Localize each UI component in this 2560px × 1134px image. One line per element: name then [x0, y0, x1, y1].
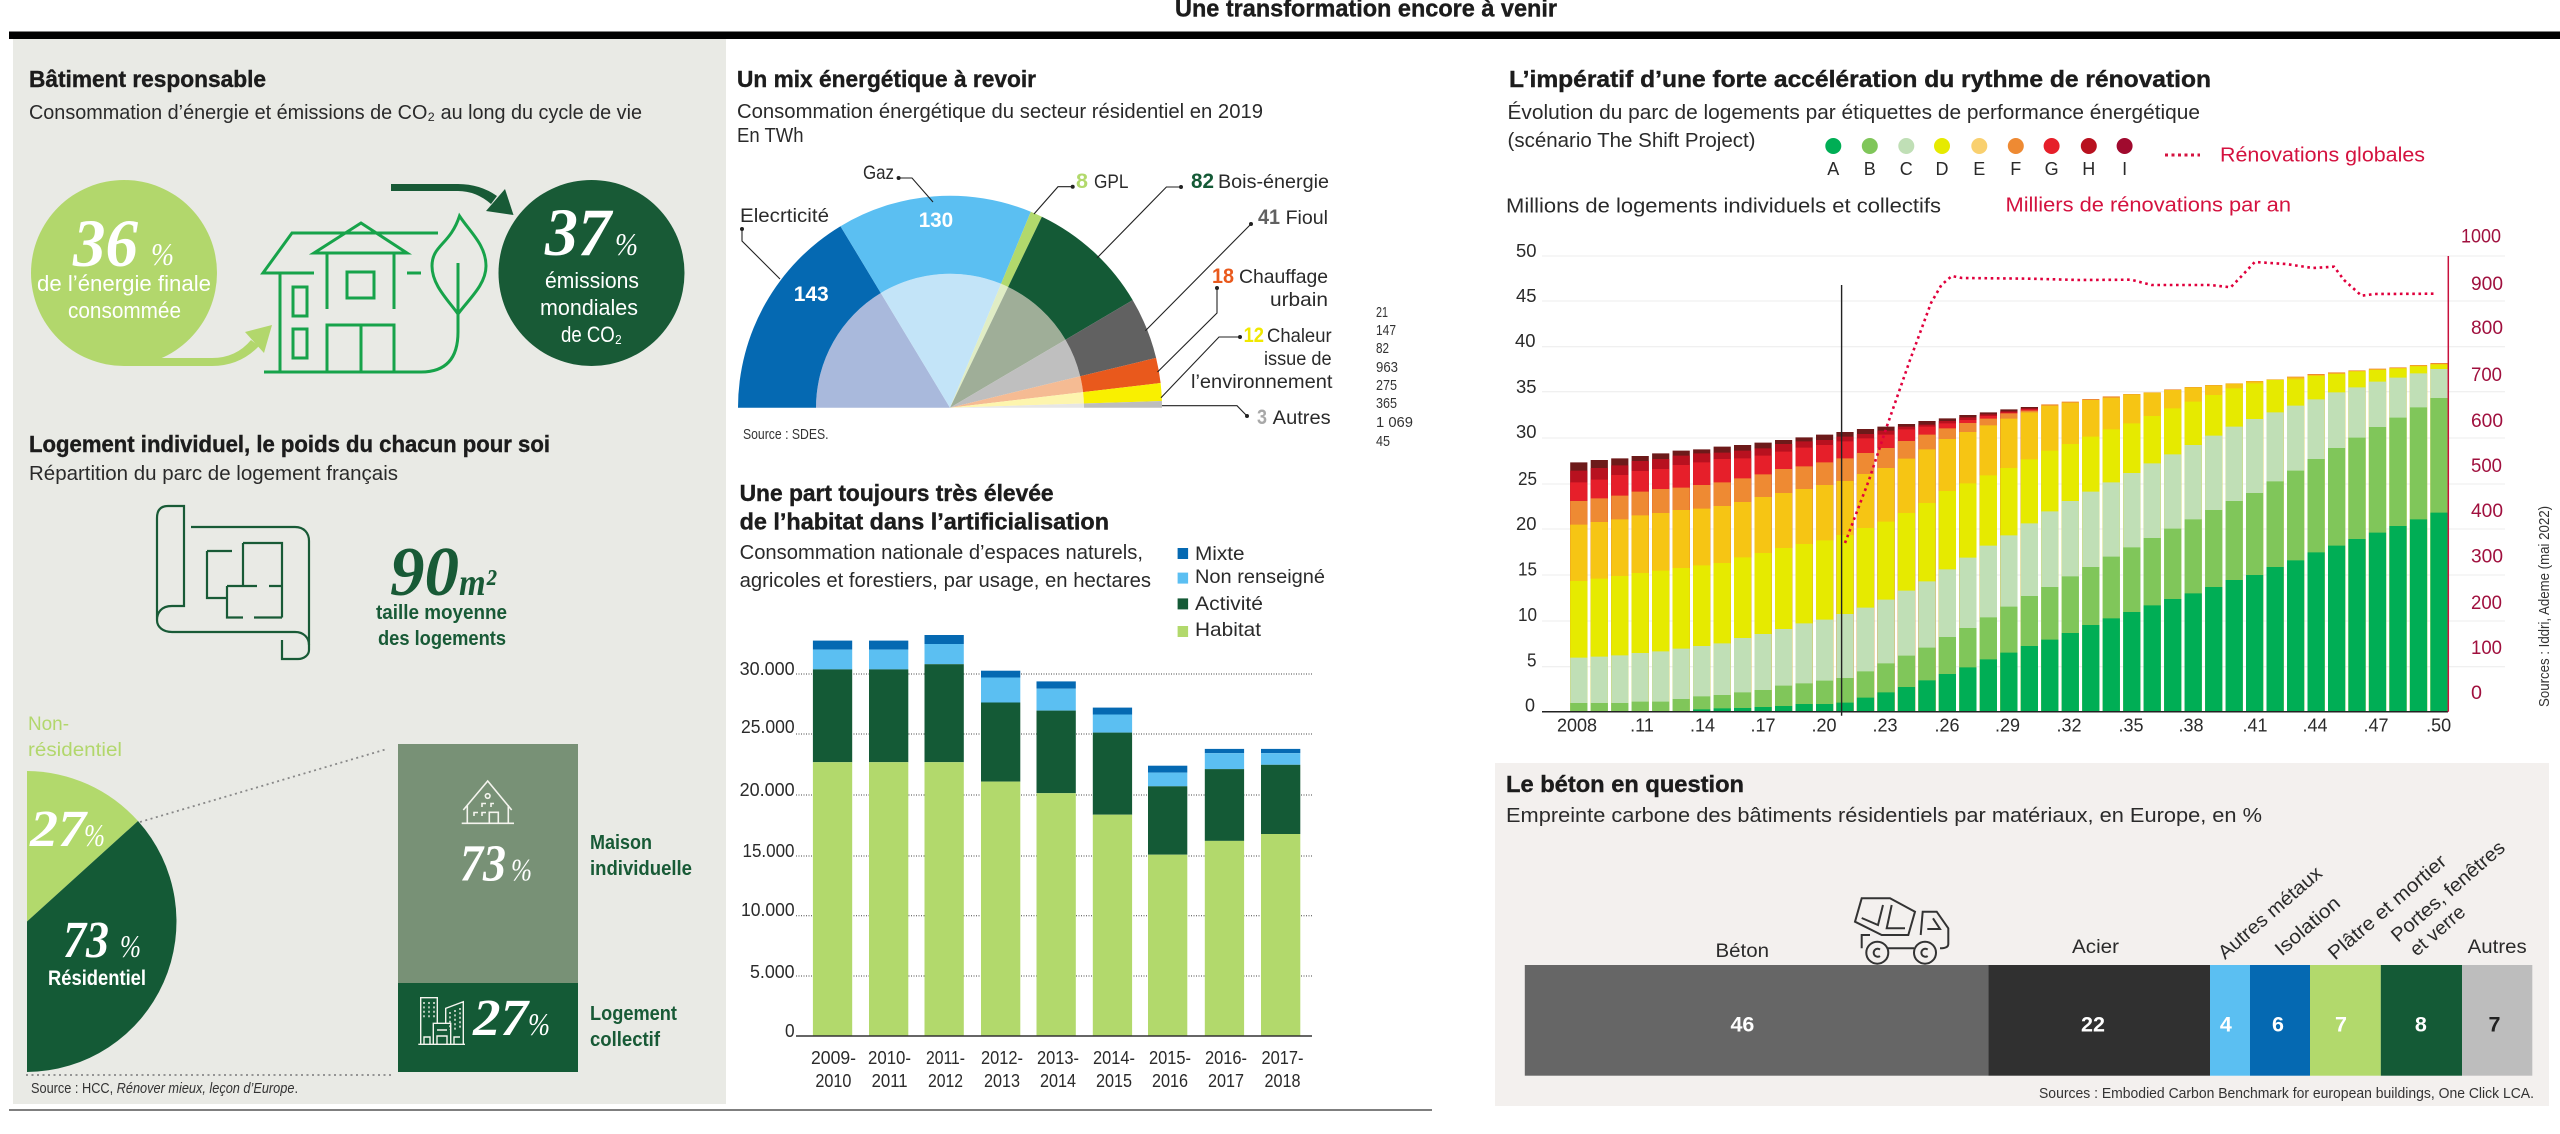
left axis labels: 35 — [1516, 377, 1536, 397]
labels: sources d'énergie: Chaleur — [1267, 325, 1332, 347]
y axis labels: 5.000 — [750, 962, 795, 982]
left axis labels — [1515, 241, 1537, 716]
stray data numbers: 82 — [1376, 340, 1389, 357]
callout: 36% énergie finale — [31, 180, 272, 366]
stray data numbers: 21 — [1376, 304, 1388, 321]
series: étiquette D — [1579, 365, 2439, 712]
chart: barre empreinte carbone: 7 — [2489, 1013, 2501, 1037]
left axis labels: 50 — [1516, 241, 1536, 261]
left axis labels: 25 — [1518, 469, 1537, 489]
panel: le béton en question — [1495, 763, 2549, 1106]
stat: 90 m² — [376, 534, 507, 650]
x axis labels: .41 — [2242, 716, 2268, 736]
subtitle: empreinte carbone: Empreinte carbone des bâtiments résidentiels par matériaux, en Europe, en % — [1506, 804, 2262, 827]
labels: sources d'énergie: Gaz — [863, 162, 894, 184]
chart: half pie résidentiel: % — [120, 928, 141, 964]
x axis labels: .29 — [1995, 716, 2020, 736]
bar: 2009-2010 — [813, 641, 852, 1036]
x axis labels: 2017 — [1208, 1071, 1244, 1091]
callout: 37% émissions mondiales: émissions — [545, 268, 639, 293]
series: étiquette B — [1579, 398, 2439, 712]
subtitle: évolution du parc: Évolution du parc de logements par étiquettes de performance énergétique — [1508, 101, 2200, 124]
y axis labels — [740, 659, 795, 1041]
labels: matériaux: Béton — [1716, 940, 1769, 962]
stray data numbers: 963 — [1376, 359, 1398, 376]
labels: matériaux: Acier — [2072, 936, 2120, 958]
x axis labels: 2014- — [1093, 1048, 1135, 1068]
subtitle: répartition du parc: Répartition du parc de logement français — [29, 462, 398, 485]
chart: half pie résidentiel: 27 — [29, 801, 88, 858]
labels: sources d'énergie: issue de — [1264, 348, 1332, 370]
legend: rénovations globales: Rénovations globales — [2220, 144, 2425, 167]
stacked bar: type de logement: 73 — [460, 836, 506, 892]
labels: sources d'énergie: Bois-énergie — [1218, 171, 1329, 193]
labels: sources d'énergie: 3 — [1257, 405, 1267, 429]
label: non-résidentiel: résidentiel — [28, 739, 122, 761]
x axis labels: 2011- — [926, 1048, 965, 1068]
callout: 36% énergie finale: % — [151, 236, 174, 272]
x axis labels: .23 — [1872, 716, 1898, 736]
chart: barre empreinte carbone: 46 — [1730, 1013, 1754, 1037]
icon: floor plan scroll — [157, 506, 309, 659]
series: étiquette I — [1579, 407, 2029, 712]
labels: matériaux: Portes, fenêtres — [2387, 837, 2510, 947]
legend: étiquettes énergétiques: D — [1936, 159, 1948, 179]
right axis labels: 500 — [2471, 456, 2502, 477]
legend: étiquettes énergétiques: B — [1864, 159, 1876, 179]
series: étiquette G — [1579, 409, 2029, 712]
right axis labels: 200 — [2471, 593, 2502, 614]
labels: matériaux: Isolation — [2271, 892, 2345, 960]
right axis labels: 300 — [2471, 547, 2503, 568]
bar: 2014-2015 — [1093, 708, 1132, 1036]
left axis labels: 15 — [1518, 560, 1537, 580]
x axis labels: .47 — [2363, 716, 2389, 736]
legend: étiquettes énergétiques: H — [2082, 159, 2095, 179]
labels: sources d'énergie: 18 — [1212, 264, 1234, 288]
x axis labels: .14 — [1690, 716, 1715, 736]
callout: 37% émissions mondiales: mondiales — [540, 295, 638, 320]
label: non-résidentiel — [28, 713, 122, 761]
stacked bar: type de logement: 27 — [472, 990, 530, 1047]
right axis labels: 600 — [2471, 411, 2503, 432]
callout: 37% émissions mondiales: 37 — [544, 194, 614, 270]
chart: barre empreinte carbone: 8 — [2415, 1013, 2427, 1037]
line: rénovations globales — [1845, 262, 2434, 543]
right axis labels: 800 — [2471, 318, 2503, 339]
x axis labels: .17 — [1750, 716, 1776, 736]
heading: bâtiment responsable: Bâtiment responsable — [29, 66, 266, 92]
series: étiquette A — [1702, 513, 2439, 712]
subtitle: espaces consommés — [740, 541, 1151, 592]
callout: 36% énergie finale: 36 — [72, 205, 138, 281]
stray data numbers: 147 — [1376, 322, 1396, 339]
arrow: vers émissions mondiales — [391, 184, 514, 215]
subtitle: évolution du parc — [1508, 101, 2200, 152]
callout: 36% énergie finale: de l’énergie finale — [37, 271, 211, 296]
heading: béton: Le béton en question — [1506, 771, 1744, 797]
labels: sources d'énergie: Fioul — [1286, 207, 1328, 229]
subtitle: consommation énergétique — [737, 100, 1263, 147]
left axis labels: 5 — [1527, 651, 1536, 671]
chart: barre empreinte carbone — [1525, 965, 2532, 1076]
right axis labels: 100 — [2471, 638, 2502, 659]
legend: étiquettes énergétiques: A — [1827, 159, 1839, 179]
icon: house and leaf — [263, 216, 486, 372]
bar: 2016-2017 — [1205, 749, 1244, 1036]
callout: 37% émissions mondiales: de CO₂ — [561, 322, 622, 347]
subtitle: évolution du parc: (scénario The Shift Project) — [1508, 129, 1756, 152]
label: maison individuelle — [590, 831, 692, 880]
x axis labels: 2009- — [811, 1048, 856, 1068]
x axis labels: 2012- — [981, 1048, 1023, 1068]
right axis labels: 400 — [2471, 501, 2503, 522]
source: SDES: Source : SDES. — [743, 426, 828, 443]
heading: artificialisation — [740, 480, 1109, 535]
label: logement collectif: Logement — [590, 1002, 677, 1025]
series: étiquette F — [1579, 363, 2439, 712]
legend: usages: Activité — [1195, 593, 1263, 615]
series: étiquette C — [1579, 369, 2439, 712]
legend: étiquettes énergétiques: G — [2045, 159, 2059, 179]
x axis labels: 2012 — [928, 1071, 963, 1091]
x axis labels: 2016 — [1152, 1071, 1188, 1091]
stat: 90 m²: 90 — [390, 534, 459, 611]
panel: rythme de rénovation — [1506, 66, 2553, 736]
x axis labels: 2008 — [1557, 716, 1597, 736]
bar: 2013-2014 — [1036, 681, 1076, 1036]
x axis labels: 2015 — [1096, 1071, 1132, 1091]
x axis labels: .38 — [2178, 716, 2204, 736]
icon: maison — [462, 781, 514, 823]
source: HCC: Source : HCC, Rénover mieux, leçon d’Europe. — [31, 1080, 298, 1097]
left axis labels: 40 — [1515, 331, 1536, 351]
y axis labels: 15.000 — [742, 841, 794, 861]
source: Iddri, Ademe: Sources : Iddri, Ademe (mai 2022) — [2536, 506, 2553, 707]
labels: sources d'énergie: urbain — [1270, 289, 1328, 311]
x axis labels: 2015- — [1149, 1048, 1191, 1068]
heading: artificialisation: Une part toujours très élevée — [740, 480, 1054, 506]
panel: mix énergétique — [737, 66, 1333, 443]
x axis labels: .35 — [2118, 716, 2144, 736]
label: logement collectif: collectif — [590, 1028, 660, 1051]
chart: half pie résidentiel: % — [84, 817, 105, 853]
legend: usages: Non renseigné — [1195, 566, 1325, 588]
y axis labels: 30.000 — [740, 659, 795, 679]
x axis labels: 2014 — [1040, 1071, 1076, 1091]
labels: sources d'énergie: Autres — [1273, 407, 1331, 429]
axis title: millions de logements: Millions de logements individuels et collectifs — [1506, 195, 1941, 218]
x axis labels: 2016- — [1205, 1048, 1247, 1068]
labels: matériaux: Autres métaux — [2214, 862, 2327, 964]
labels: matériaux — [1716, 837, 2527, 964]
panel: artificialisation — [740, 480, 1325, 1091]
labels: matériaux: Autres — [2468, 936, 2527, 958]
chart: consommation d'espaces par usage — [740, 635, 1312, 1091]
labels: sources d'énergie: 82 — [1191, 169, 1214, 193]
bar: 2015-2016 — [1148, 766, 1187, 1036]
chart: half pie résidentiel — [27, 771, 176, 1072]
legend: usages — [1178, 543, 1325, 641]
legend: usages: Mixte — [1195, 543, 1245, 565]
heading: artificialisation: de l’habitat dans l’artificialisation — [740, 509, 1109, 535]
legend: étiquettes énergétiques — [1825, 138, 2133, 179]
labels: sources d'énergie — [740, 162, 1333, 429]
stat: 90 m²: des logements — [378, 627, 506, 650]
bar: 2010-2011 — [869, 641, 908, 1036]
labels: matériaux: Plâtre et mortier — [2324, 850, 2451, 964]
x axis labels: .50 — [2426, 716, 2451, 736]
left axis labels: 0 — [1525, 696, 1535, 716]
x axis labels: 2013 — [984, 1071, 1020, 1091]
subtitle: consommation d'énergie: Consommation d’énergie et émissions de CO₂ au long du cycle de vie — [29, 101, 642, 124]
stray data numbers: 365 — [1376, 395, 1397, 412]
labels: sources d'énergie: l’environnement — [1191, 371, 1333, 393]
stray data numbers: 1 069 — [1376, 414, 1413, 431]
label: non-résidentiel: Non- — [28, 713, 69, 735]
bar: 2011-2012 — [924, 635, 964, 1036]
subtitle: espaces consommés: agricoles et forestiers, par usage, en hectares — [740, 569, 1151, 592]
labels: sources d'énergie: 8 — [1076, 169, 1088, 193]
legend: étiquettes énergétiques: C — [1900, 159, 1913, 179]
y axis labels: 20.000 — [740, 780, 795, 800]
right axis labels: 1000 — [2461, 227, 2501, 248]
legend: étiquettes énergétiques: E — [1973, 159, 1985, 179]
x axis labels — [1557, 716, 2451, 736]
heading: rénovation: L’impératif d’une forte accélération du rythme de rénovation — [1509, 66, 2211, 92]
x axis labels: .11 — [1630, 716, 1654, 736]
x axis labels: .26 — [1934, 716, 1960, 736]
heading: logement individuel: Logement individuel, le poids du chacun pour soi — [29, 431, 550, 457]
callout: 36% énergie finale: consommée — [68, 298, 181, 323]
labels: sources d'énergie: Elecrticité — [740, 205, 829, 227]
left axis labels: 45 — [1516, 286, 1536, 306]
stat: 90 m²: m² — [459, 562, 497, 604]
stray data numbers: 45 — [1376, 433, 1390, 450]
stacked bar: type de logement: % — [528, 1006, 550, 1042]
stacked bar: type de logement — [398, 744, 578, 1072]
callout: 37% émissions mondiales: % — [615, 226, 638, 262]
left axis labels: 30 — [1516, 422, 1536, 442]
chart: barre empreinte carbone: 6 — [2272, 1013, 2284, 1037]
chart: half pie résidentiel: Résidentiel — [48, 966, 146, 990]
x axis labels: 2017- — [1262, 1048, 1304, 1068]
x axis labels: 2010 — [815, 1071, 851, 1091]
legend: étiquettes énergétiques: F — [2010, 159, 2021, 179]
bar: 2017-2018 — [1261, 749, 1300, 1036]
legend: usages: Habitat — [1195, 619, 1262, 641]
labels: sources d'énergie: 12 — [1244, 323, 1264, 347]
label: maison individuelle: individuelle — [590, 857, 692, 880]
x axis labels: .44 — [2302, 716, 2328, 736]
x axis labels — [811, 1048, 1304, 1091]
x axis labels: 2013- — [1037, 1048, 1079, 1068]
chart: semi-donut énergie — [738, 196, 1162, 408]
y axis labels: 25.000 — [741, 717, 795, 737]
x axis labels: 2018 — [1264, 1071, 1300, 1091]
chart: barre empreinte carbone: 7 — [2335, 1013, 2347, 1037]
leader lines — [740, 176, 1253, 418]
x axis labels: .32 — [2056, 716, 2082, 736]
axis title: milliers de rénovations: Milliers de rénovations par an — [2006, 194, 2291, 217]
right axis labels: 900 — [2471, 274, 2503, 295]
icon: camion toupie — [1855, 898, 1948, 964]
left axis labels: 10 — [1518, 605, 1537, 625]
label: maison individuelle: Maison — [590, 831, 652, 854]
chart: semi-donut énergie: 130 — [919, 208, 953, 232]
label: logement collectif — [590, 1002, 677, 1051]
stray data numbers: 275 — [1376, 377, 1397, 394]
right axis labels: 0 — [2471, 683, 2482, 704]
top black rule — [9, 32, 2560, 39]
x axis labels: .20 — [1811, 716, 1837, 736]
legend: étiquettes énergétiques: I — [2122, 159, 2127, 179]
labels: sources d'énergie: 41 — [1258, 205, 1280, 229]
source: embodied carbon: Sources : Embodied Carbon Benchmark for european buildings, One Click LCA. — [2039, 1085, 2534, 1102]
icon: immeubles — [418, 998, 465, 1044]
subtitle: consommation énergétique: Consommation énergétique du secteur résidentiel en 2019 — [737, 100, 1263, 123]
chart: barre empreinte carbone: 22 — [2081, 1013, 2105, 1037]
series: étiquette H — [1579, 408, 2029, 712]
labels: sources d'énergie: Chauffage — [1239, 266, 1328, 288]
heading: mix énergétique: Un mix énergétique à revoir — [737, 66, 1036, 92]
subtitle: consommation énergétique: En TWh — [737, 124, 804, 147]
series: étiquette E — [1579, 364, 2439, 712]
chart: half pie résidentiel: 73 — [63, 912, 109, 969]
labels: sources d'énergie: GPL — [1094, 171, 1129, 193]
y axis labels: 10.000 — [741, 900, 795, 920]
left axis labels: 20 — [1516, 514, 1536, 534]
callout: 37% émissions mondiales — [498, 180, 684, 366]
right axis labels — [2461, 227, 2503, 704]
chart: barre empreinte carbone: 4 — [2220, 1013, 2232, 1037]
y axis labels: 0 — [785, 1021, 795, 1041]
chart: parc de logements par étiquette — [1515, 227, 2505, 736]
stat: 90 m²: taille moyenne — [376, 601, 507, 624]
panel: bâtiment responsable and logement — [13, 39, 726, 1104]
x axis labels: 2010- — [868, 1048, 911, 1068]
chart: semi-donut énergie: 143 — [794, 282, 829, 306]
x axis labels: 2011 — [872, 1071, 908, 1091]
right axis labels: 700 — [2471, 365, 2502, 386]
subtitle: espaces consommés: Consommation nationale d’espaces naturels, — [740, 541, 1143, 564]
bar: 2012-2013 — [981, 671, 1020, 1036]
labels: matériaux: et verre — [2406, 901, 2470, 961]
stray data numbers — [1376, 304, 1413, 450]
stacked bar: type de logement: % — [511, 852, 532, 888]
